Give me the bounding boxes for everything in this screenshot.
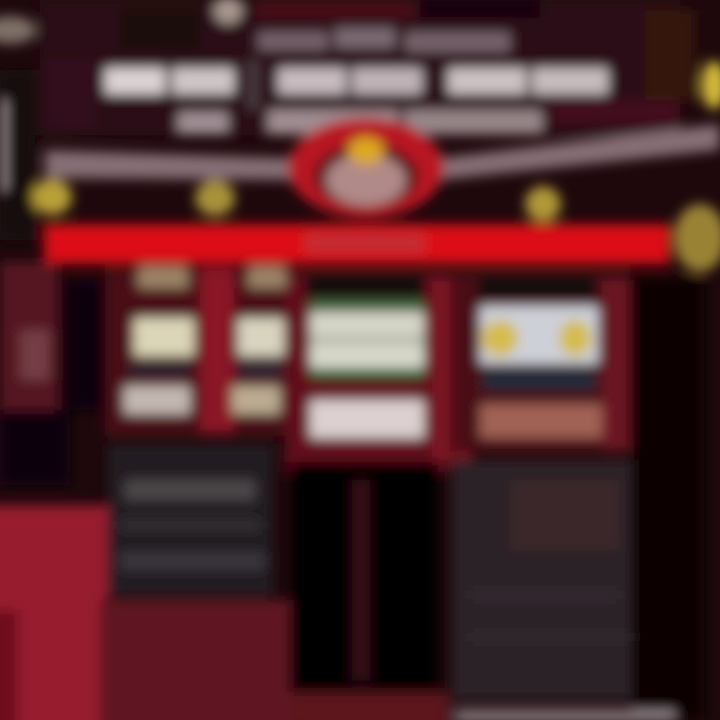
center machine [292,274,438,690]
emblem [288,118,444,218]
background ceiling [0,0,695,240]
right machine [452,276,677,700]
top corner highlights [0,0,242,190]
blurred title lines [105,28,608,134]
right black column [632,278,704,720]
marquee lights [32,61,720,272]
machine two [232,266,286,414]
cabinet frames [105,268,630,472]
left side cabinet [0,262,104,485]
marquee band [45,124,720,180]
machine one [108,266,273,595]
floor [0,505,675,720]
red marquee bar [44,224,670,264]
